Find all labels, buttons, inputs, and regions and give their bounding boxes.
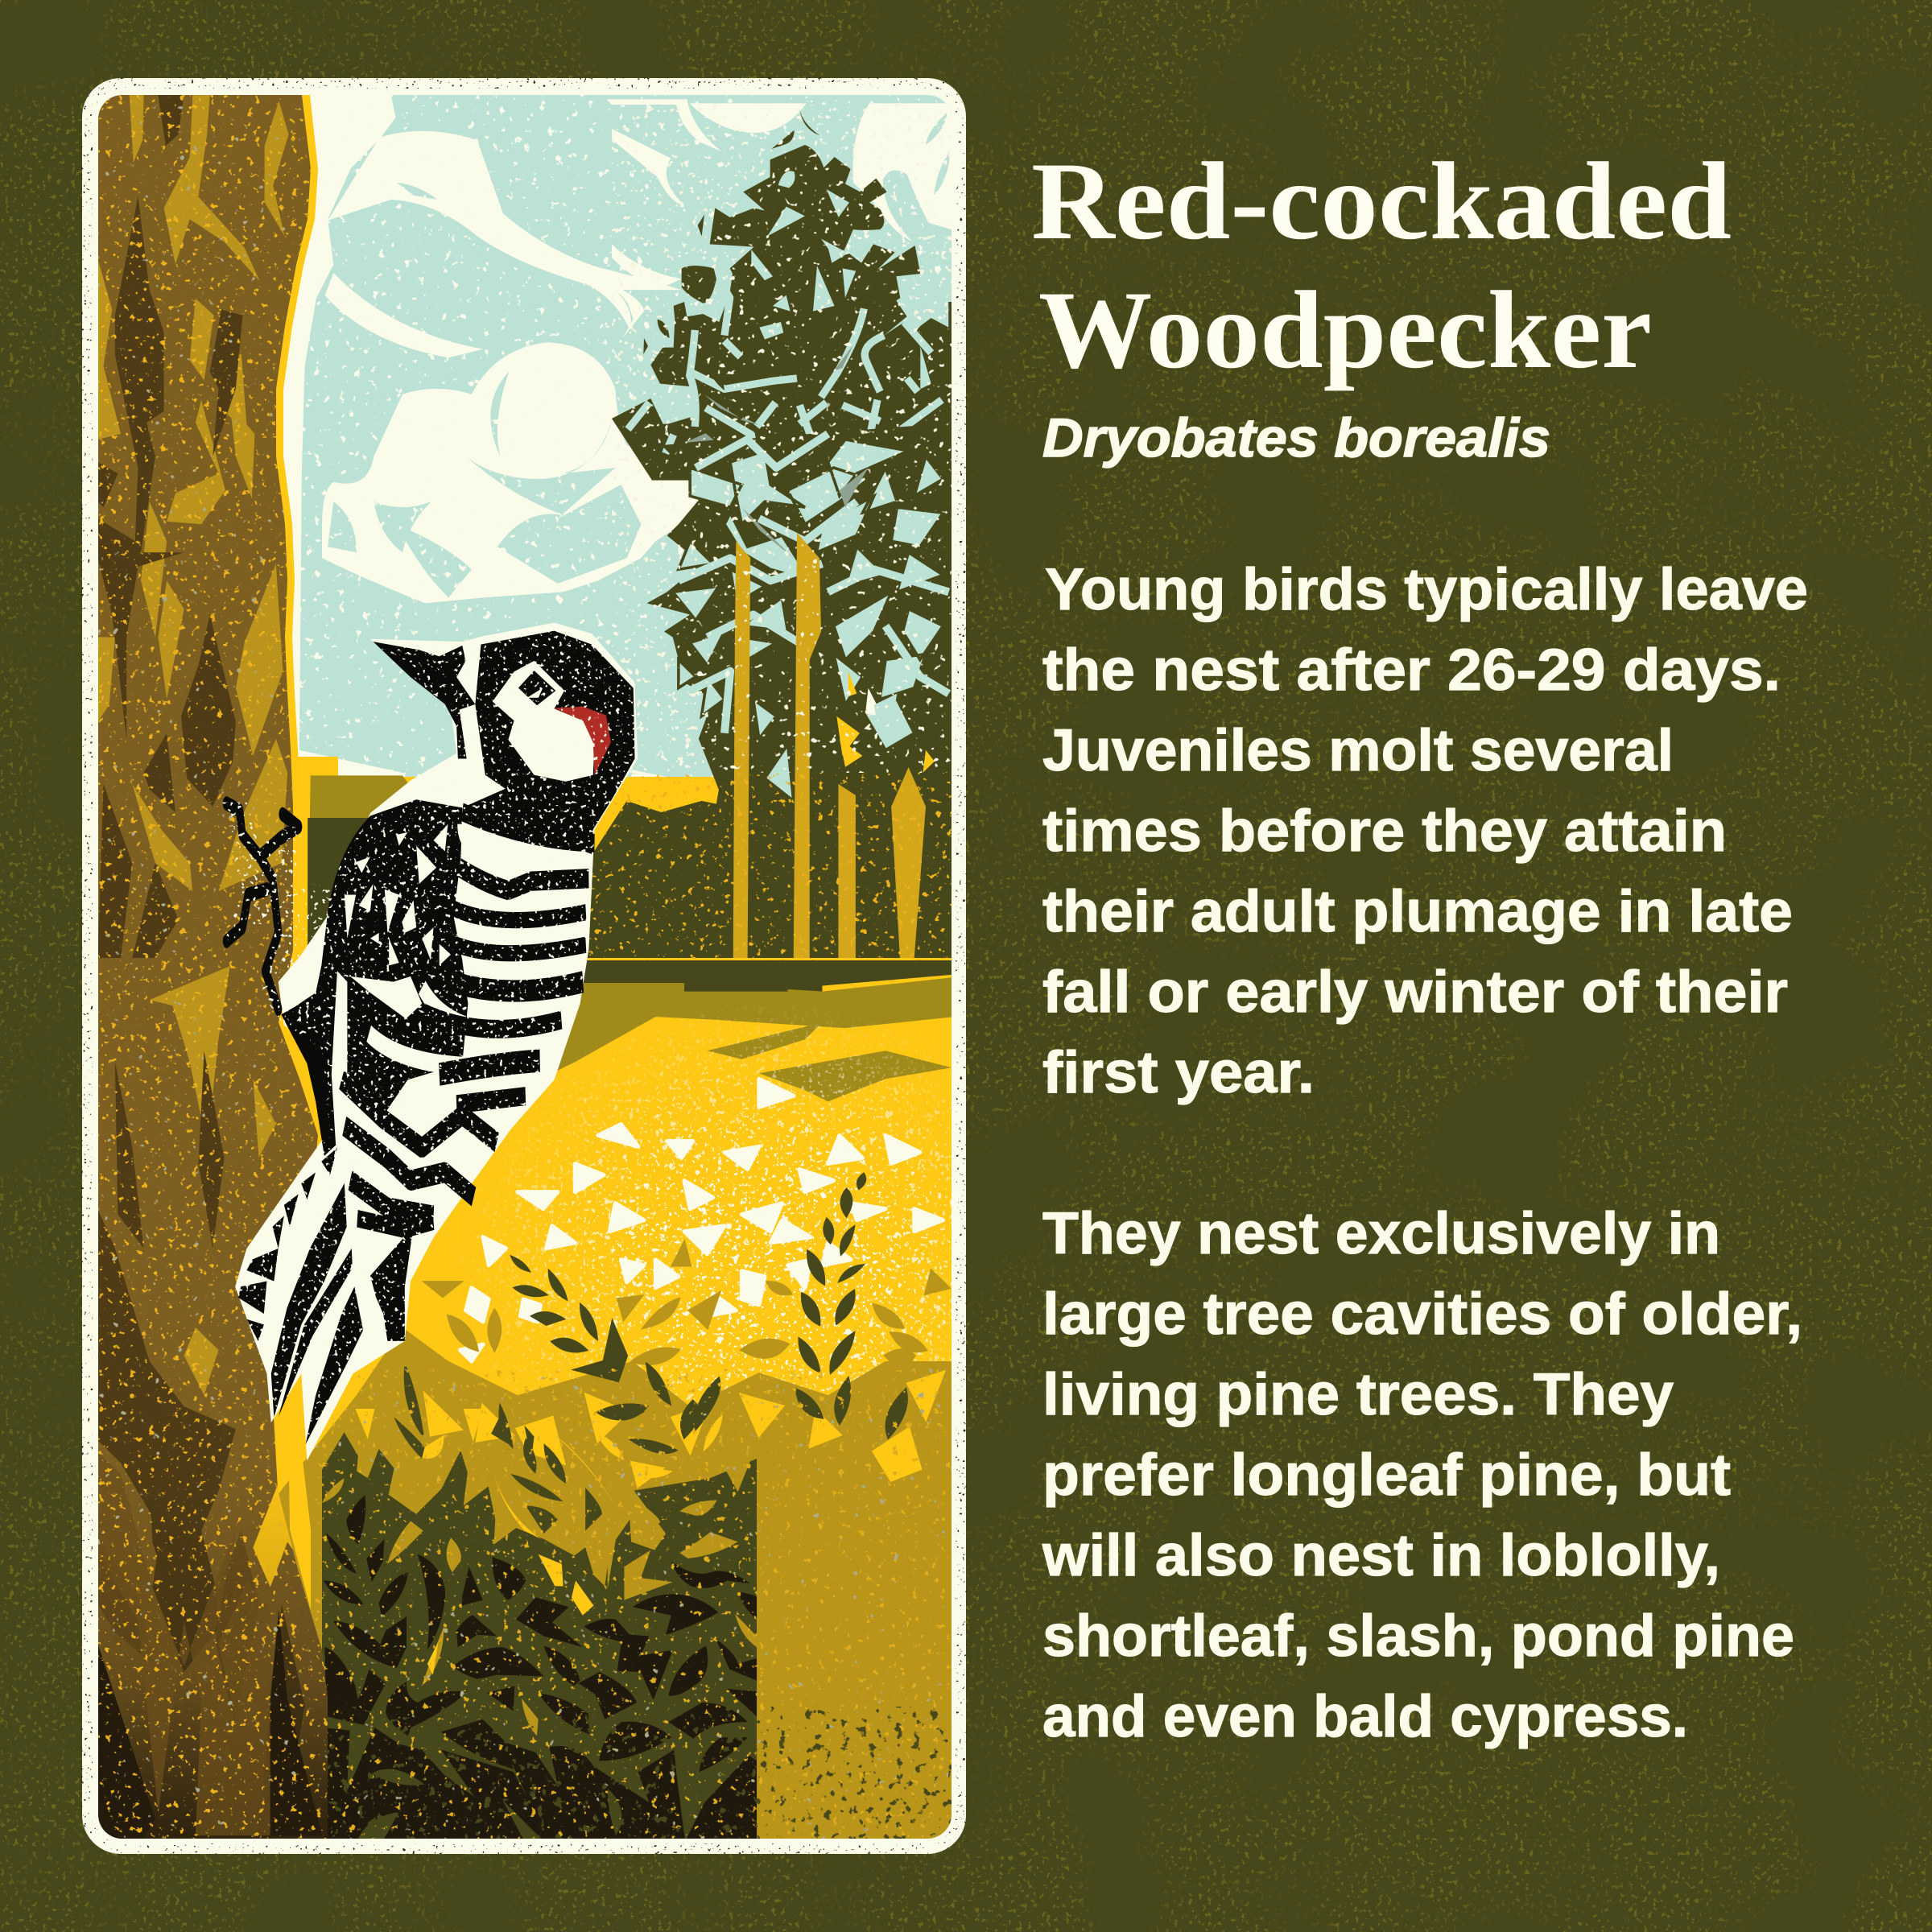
body paragraph 2: will also nest in loblolly, — [1042, 1523, 1720, 1588]
beak — [374, 642, 475, 759]
artwork — [98, 95, 952, 1839]
dark bark streaks — [97, 95, 242, 958]
bird speckles — [209, 620, 644, 1465]
ground — [274, 757, 952, 1493]
cream card frame — [82, 78, 966, 1854]
clouds — [276, 95, 956, 807]
foliage — [276, 1174, 1513, 1858]
subtitle: scientific name: Dryobates borealis — [1042, 407, 1550, 469]
lower tree and trunks — [647, 423, 957, 958]
body paragraph 1 — [1042, 557, 1808, 1105]
foliage speckle — [314, 1368, 958, 1843]
body paragraph 2 — [1042, 1201, 1802, 1749]
body paragraph 1: fall or early winter of their — [1042, 960, 1788, 1025]
mid distance shadow and bushes — [309, 775, 407, 818]
foreground bush left half — [322, 1408, 757, 1858]
foot — [226, 803, 299, 1009]
woodpecker — [209, 620, 644, 1465]
gold bark streaks — [97, 95, 289, 891]
leg patch — [279, 917, 327, 1006]
red cheek patch — [554, 707, 611, 775]
eye — [514, 662, 564, 712]
title: Red-cockaded — [1031, 139, 1732, 262]
body paragraph 1: times before they attain — [1042, 799, 1727, 864]
illustration panel: woodpecker card — [81, 77, 967, 1855]
trunk speckles — [89, 89, 346, 1852]
gold foliage layer — [276, 1327, 952, 1847]
dark sprig leaves — [405, 1174, 906, 1472]
foreground bush right half — [1079, 1409, 1513, 1858]
wing markings — [345, 824, 451, 1020]
body paragraph 2: living pine trees. They — [1042, 1362, 1674, 1427]
tail feathers — [238, 1148, 363, 1444]
ground cream speckle — [459, 1006, 952, 1403]
far ground and shadows — [460, 960, 955, 1361]
body paragraph 2: They nest exclusively in — [1042, 1201, 1720, 1266]
cream streak on flank — [369, 824, 485, 1066]
title: Woodpecker — [1038, 268, 1652, 391]
far bush yellow speckle — [580, 773, 958, 990]
frame rough edge — [87, 83, 961, 1849]
body paragraph 2: shortleaf, slash, pond pine — [1042, 1604, 1794, 1669]
cream ground fragments — [460, 1079, 943, 1361]
body paragraph 1: first year. — [1042, 1040, 1315, 1105]
distant pine tree — [612, 109, 958, 958]
trunk base shadow — [89, 1449, 346, 1852]
cream cheek — [493, 661, 595, 782]
bird cream outline and body — [235, 623, 638, 1461]
body paragraph 1: Juveniles molt several — [1042, 718, 1674, 783]
sky speckle — [299, 95, 952, 777]
yellow edge of trunk — [279, 95, 314, 998]
lower belly and vent — [370, 1227, 414, 1341]
body paragraph 2: prefer longleaf pine, but — [1042, 1443, 1731, 1508]
title — [1031, 139, 1732, 391]
gold trunks — [733, 533, 926, 958]
sky — [299, 95, 952, 777]
tree trunk with bark — [89, 89, 346, 1852]
breast stripes — [341, 812, 595, 1229]
upper tree crown — [612, 109, 958, 481]
body paragraph 1: Young birds typically leave — [1045, 557, 1808, 622]
gold leaves on yellow — [426, 1243, 949, 1373]
wing and back — [281, 799, 468, 1156]
body paragraph 2: large tree cavities of older, — [1042, 1282, 1802, 1347]
body paragraph 1: the nest after 26-29 days. — [1042, 638, 1781, 703]
body paragraph 1: their adult plumage in late — [1042, 879, 1793, 944]
tree speckle — [612, 105, 958, 773]
head — [462, 631, 635, 854]
body paragraph 2: and even bald cypress. — [1042, 1684, 1688, 1749]
